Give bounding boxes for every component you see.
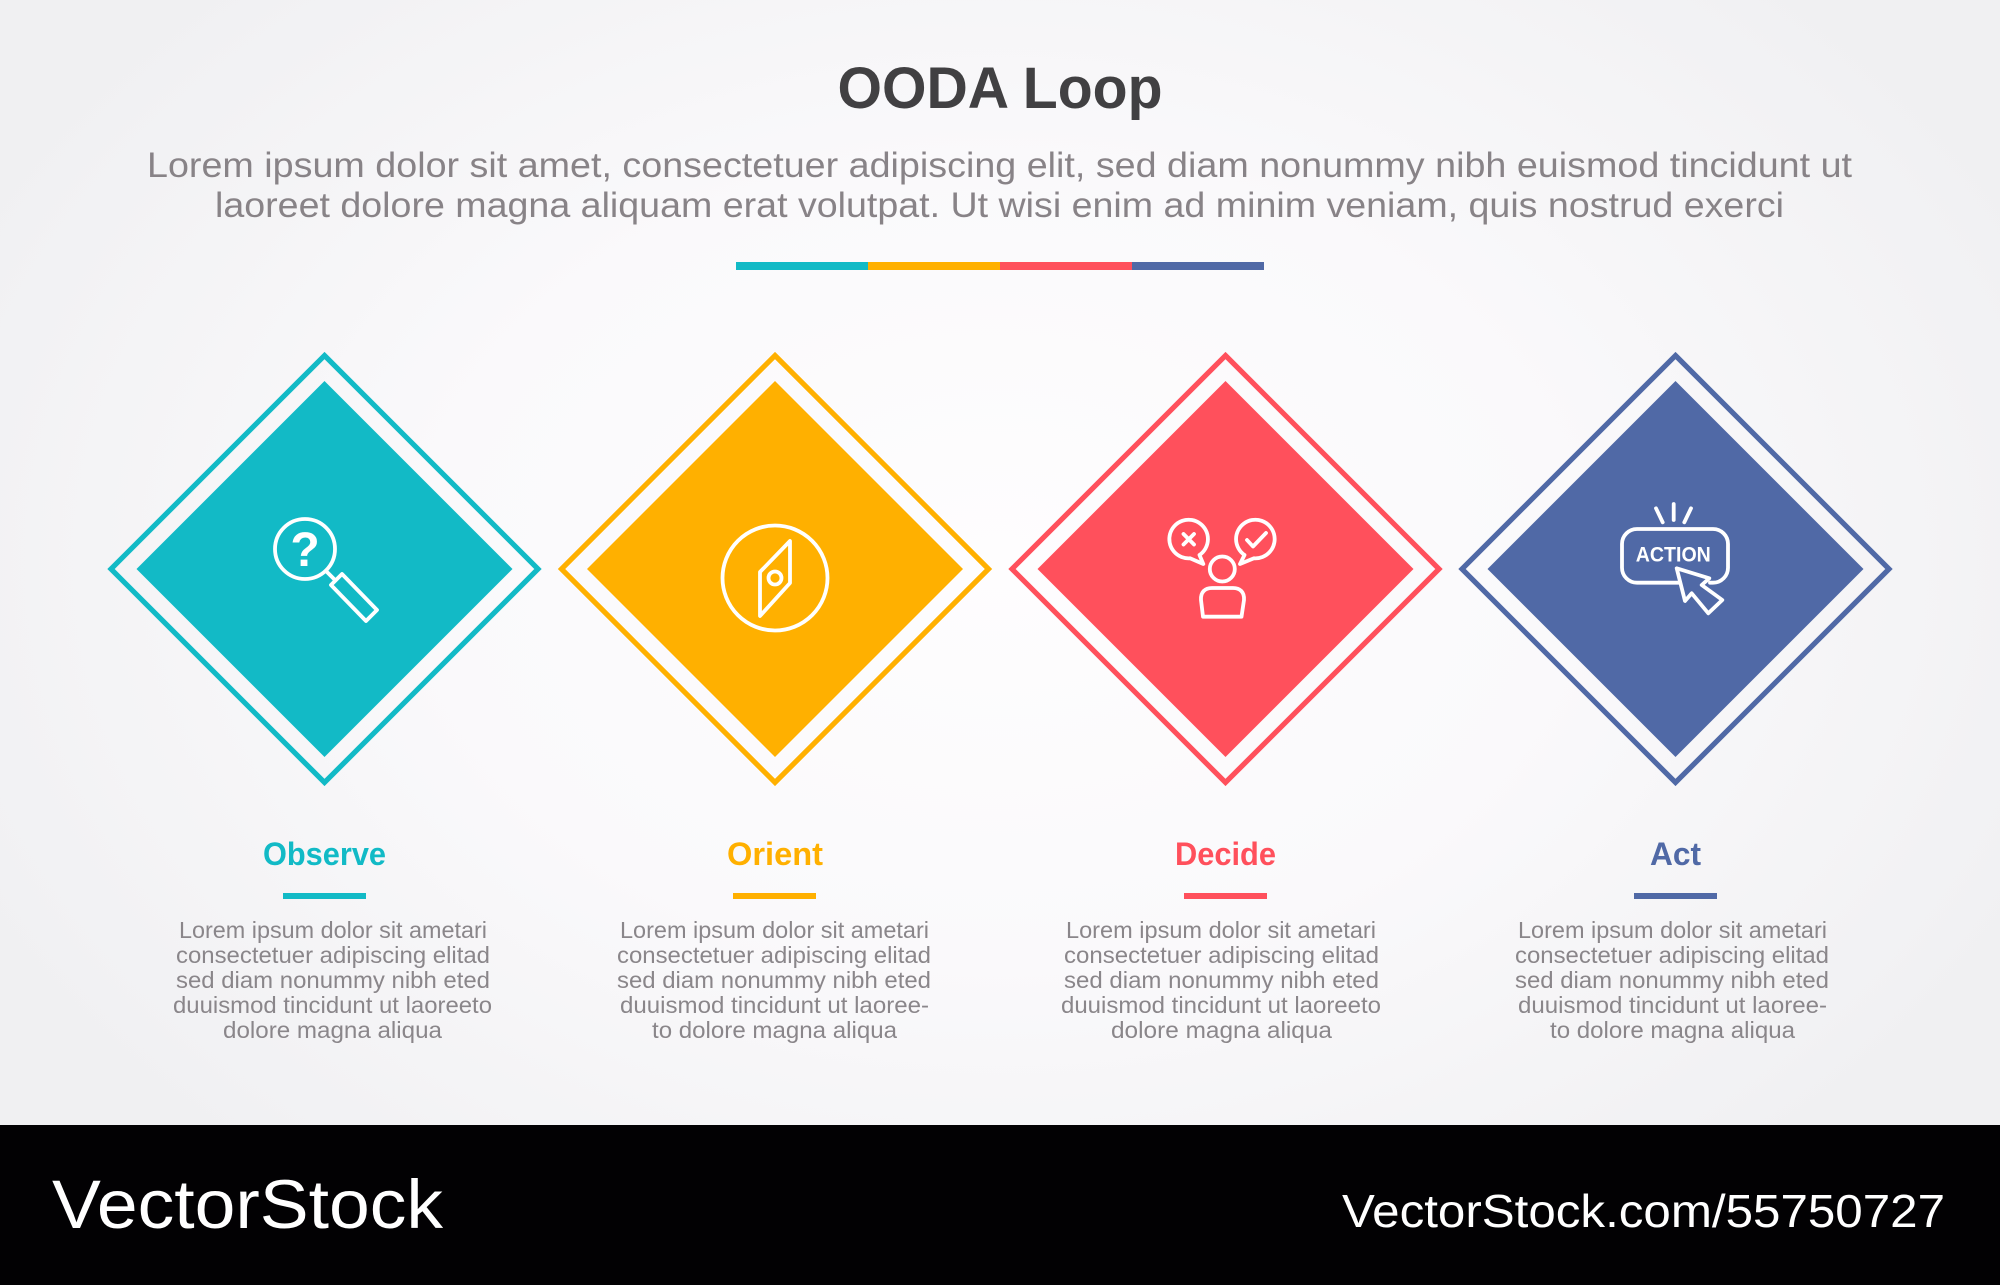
icon: action button with cursor bbox=[1622, 504, 1728, 613]
act body text: Lorem ipsum dolor sit ametari bbox=[1518, 917, 1827, 943]
watermark footer band bbox=[0, 1125, 2000, 1285]
decide heading: Decide bbox=[1175, 836, 1276, 872]
act body text: to dolore magna aliqua bbox=[1550, 1017, 1795, 1043]
orient body text: Lorem ipsum dolor sit ametari bbox=[620, 917, 929, 943]
observe body text: Lorem ipsum dolor sit ametari bbox=[179, 917, 487, 943]
observe heading: Observe bbox=[263, 836, 386, 872]
subtitle text block: laoreet dolore magna aliquam erat volutpat. Ut wisi enim ad minim veniam, quis nostrud exerci bbox=[215, 186, 1784, 225]
icon: action button with cursor: ACTION bbox=[1636, 544, 1711, 567]
orient heading: Orient bbox=[727, 836, 823, 872]
decide body text: consectetuer adipiscing elitad bbox=[1064, 942, 1379, 968]
act underline bbox=[1634, 893, 1717, 899]
orient body text: sed diam nonummy nibh eted bbox=[617, 967, 931, 993]
act heading: Act bbox=[1650, 836, 1701, 872]
observe body text: consectetuer adipiscing elitad bbox=[176, 942, 490, 968]
decide diamond bbox=[1012, 356, 1439, 782]
title: OODA Loop bbox=[838, 56, 1162, 121]
decide body text: sed diam nonummy nibh eted bbox=[1064, 967, 1379, 993]
act body text: duuismod tincidunt ut laoree- bbox=[1518, 992, 1827, 1018]
decide underline bbox=[1184, 893, 1267, 899]
icon: compass bbox=[722, 526, 828, 630]
panel: orient bbox=[562, 356, 988, 1043]
observe body text: sed diam nonummy nibh eted bbox=[176, 967, 490, 993]
decide body text: duuismod tincidunt ut laoreeto bbox=[1061, 992, 1381, 1018]
decide body text bbox=[1061, 917, 1381, 1043]
act body text: consectetuer adipiscing elitad bbox=[1515, 942, 1829, 968]
icon: person deciding between cross and check bbox=[1169, 520, 1275, 617]
multicolour divider bar bbox=[736, 262, 1264, 270]
act body text bbox=[1515, 917, 1829, 1043]
orient body text: to dolore magna aliqua bbox=[652, 1017, 897, 1043]
act diamond bbox=[1462, 356, 1889, 782]
subtitle text block bbox=[147, 146, 1852, 225]
orient underline bbox=[733, 893, 816, 899]
orient body text bbox=[617, 917, 931, 1043]
orient body text: duuismod tincidunt ut laoree- bbox=[620, 992, 929, 1018]
observe diamond bbox=[111, 356, 538, 782]
icon: magnifying glass with question mark: ? bbox=[290, 524, 320, 577]
watermark logo text: VectorStock bbox=[52, 1166, 444, 1243]
icon: magnifying glass with question mark bbox=[275, 519, 377, 621]
panel: decide bbox=[1012, 356, 1439, 1043]
panel: act bbox=[1462, 356, 1889, 1043]
decide body text: Lorem ipsum dolor sit ametari bbox=[1066, 917, 1376, 943]
watermark url text: VectorStock.com/55750727 bbox=[1342, 1185, 1945, 1237]
orient body text: consectetuer adipiscing elitad bbox=[617, 942, 931, 968]
observe body text bbox=[173, 917, 492, 1043]
decide body text: dolore magna aliqua bbox=[1111, 1017, 1332, 1043]
subtitle text block: Lorem ipsum dolor sit amet, consectetuer adipiscing elit, sed diam nonummy nibh euismod tincidunt ut bbox=[147, 146, 1852, 185]
orient diamond bbox=[562, 356, 988, 782]
panel: observe bbox=[111, 356, 538, 1043]
observe body text: duuismod tincidunt ut laoreeto bbox=[173, 992, 492, 1018]
observe body text: dolore magna aliqua bbox=[223, 1017, 442, 1043]
act body text: sed diam nonummy nibh eted bbox=[1515, 967, 1829, 993]
observe underline bbox=[283, 893, 366, 899]
